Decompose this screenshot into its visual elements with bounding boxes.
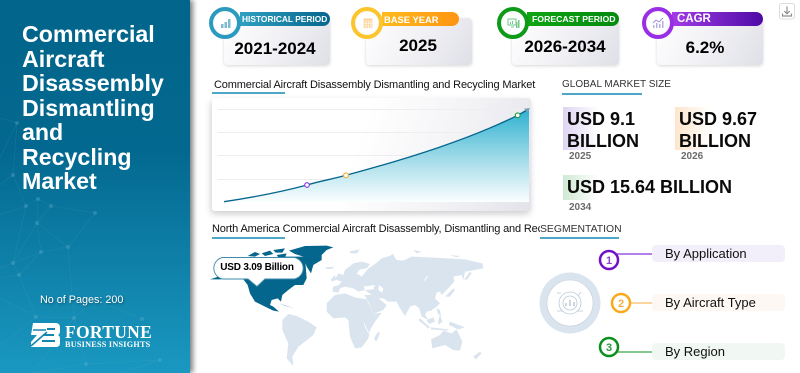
title: Commercial [22,21,155,47]
logo mark [31,323,60,347]
panel: growth chart [212,98,531,211]
logo wordmark: FORTUNE [65,322,152,342]
heading: segmentation: SEGMENTATION [540,224,622,235]
callout: north america value [213,257,304,287]
heading: global market size: GLOBAL MARKET SIZE [562,79,671,90]
title: Disassembly [22,70,164,96]
connectors [617,253,653,255]
card: historical period: HISTORICAL PERIOD [242,14,327,24]
segmentation diagram: 1 [606,255,612,267]
stat: 2034 market size [563,175,732,213]
card: forecast period: 2026-2034 [524,37,606,56]
title: Aircraft [22,46,104,72]
callout shape [213,257,304,287]
logo [31,322,152,349]
card: forecast period: FORECAST PERIOD [532,14,616,24]
card: CAGR: 6.2% [686,38,724,57]
stat: 2034 market size: 2034 [569,202,591,213]
title [22,21,164,194]
label: by application [652,245,785,262]
card: historical period [209,7,332,68]
card: CAGR [642,7,764,68]
label: by aircraft type [652,294,785,311]
segmentation diagram: 2 [618,298,624,310]
card: base year: 2025 [399,36,437,55]
title: and [22,119,63,145]
stat: 2026 market size [675,107,757,162]
card: base year [351,7,474,68]
segmentation diagram: 3 [606,342,612,354]
card: base year: BASE YEAR [384,14,439,25]
label: by application: By Application [665,246,747,261]
stat: 2025 market size: BILLION [567,131,639,151]
network background [0,118,162,373]
old world landmasses [325,249,483,359]
title: Recycling [22,144,132,170]
card: historical period: 2021-2024 [234,39,316,58]
stat: 2025 market size [563,107,639,162]
icon: download [779,3,795,20]
pages count: No of Pages: 200 [40,294,123,306]
logo tagline: BUSINESS INSIGHTS [65,340,150,349]
stat: 2026 market size: 2026 [681,151,703,162]
callout text: USD 3.09 Billion [220,262,294,273]
stat: 2026 market size: BILLION [679,131,751,151]
panel: sidebar [0,0,190,373]
card: forecast period [497,7,620,68]
title: Market [22,168,97,194]
north america highlight [210,246,333,312]
title: Dismantling [22,94,155,120]
label: by region [652,343,785,360]
segmentation diagram [540,250,652,358]
world map [210,246,484,366]
heading: market chart: Commercial Aircraft Disassembly Dismantling and Recycling Market [214,79,535,91]
stat: 2025 market size: 2025 [569,151,591,162]
stat: 2026 market size: USD 9.67 [679,109,757,129]
stat: 2025 market size: USD 9.1 [567,109,635,129]
card: CAGR: CAGR [677,13,711,25]
stat: 2034 market size: USD 15.64 BILLION [567,177,732,197]
area line chart [218,108,531,202]
label: by region: By Region [665,344,725,359]
label: by aircraft type: By Aircraft Type [665,295,756,310]
south america [282,314,317,366]
